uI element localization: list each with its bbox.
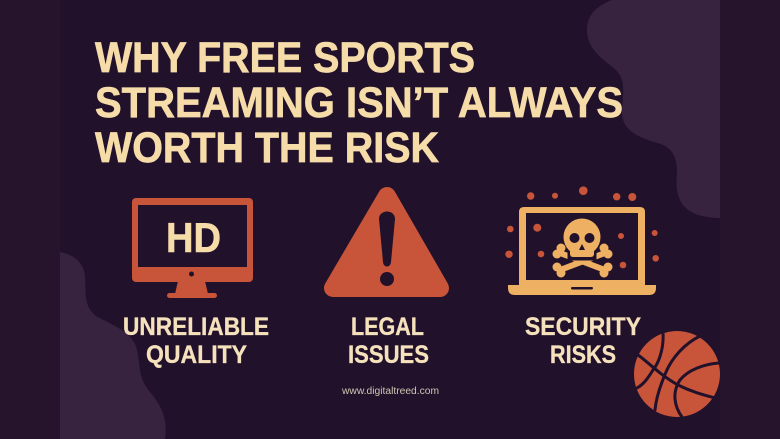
title — [95, 34, 623, 172]
label: unreliable quality: UNRELIABLE — [123, 313, 269, 341]
laptop body — [508, 207, 656, 295]
label: unreliable quality — [123, 313, 269, 369]
icon: warning triangle — [333, 196, 440, 288]
icon: laptop with skull — [505, 186, 659, 295]
skull and crossbones — [552, 218, 612, 278]
label: security risks: SECURITY — [525, 313, 641, 341]
label: unreliable quality: QUALITY — [146, 341, 247, 369]
background blob: top right — [587, 0, 720, 218]
title: WORTH THE RISK — [95, 124, 439, 172]
icon: basketball — [634, 331, 720, 417]
label: security risks: RISKS — [550, 341, 616, 369]
label: legal issues: LEGAL — [351, 313, 424, 341]
website url: www.digitaltreed.com — [341, 386, 439, 397]
icon: HD monitor: HD — [166, 214, 221, 261]
label: legal issues — [348, 313, 429, 369]
label: security risks — [525, 313, 641, 369]
malware dots — [505, 186, 659, 268]
title: STREAMING ISN’T ALWAYS — [95, 79, 623, 127]
label: legal issues: ISSUES — [348, 341, 429, 369]
title: WHY FREE SPORTS — [95, 34, 475, 82]
icon: HD monitor — [132, 198, 253, 298]
background blob: bottom left — [60, 252, 166, 439]
